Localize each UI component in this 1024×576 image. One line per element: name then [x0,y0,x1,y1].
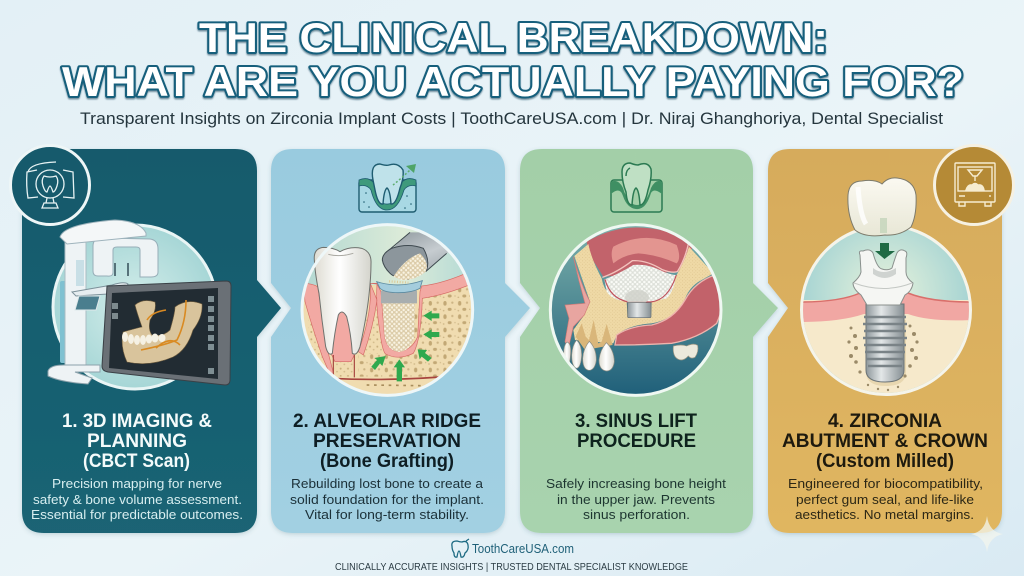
panel 3: sinus lift procedure [520,149,778,533]
description: aesthetics. No metal margins. [795,507,974,522]
lower soft tissue [615,275,723,345]
heading: 3. SINUS LIFT [575,411,697,432]
illustration: CBCT scanner with tablet [48,220,231,389]
panel 1: 3D imaging and planning [10,146,281,533]
front teeth [564,340,614,371]
circle border [302,225,473,395]
left soft tissue [565,257,590,348]
molar tooth [314,247,371,354]
socket graft [382,303,415,352]
green arrows [371,311,439,381]
icon: tooth with bone growth [359,164,416,212]
description: Precision mapping for nerve [52,476,222,491]
circle border [550,225,721,395]
panel 1 background [22,149,281,533]
description: Rebuilding lost bone to create a [291,476,484,491]
description: safety & bone volume assessment. [33,492,242,507]
bone mass [573,244,713,343]
footer tagline: CLINICALLY ACCURATE INSIGHTS | TRUSTED DENTAL SPECIALIST KNOWLEDGE [335,561,688,573]
panel 3 background [520,149,778,533]
description: Engineered for biocompatibility, [788,476,983,491]
grafting syringe [394,232,448,270]
gum tissue [303,283,334,377]
heading: (Bone Grafting) [320,451,454,472]
remaining molar [673,344,698,360]
subtitle: Transparent Insights on Zirconia Implant Costs | ToothCareUSA.com | Dr. Niraj Ghanghoriya, Dental Specialist [80,109,943,128]
heading: (Custom Milled) [816,451,954,472]
arrow [875,243,895,259]
description [290,476,484,522]
title: THE CLINICAL BREAKDOWN: [199,14,828,61]
implant fixture [628,303,651,318]
panel 2: alveolar ridge preservation [271,149,530,533]
description: in the upper jaw. Prevents [557,492,716,507]
abutment [853,250,913,305]
illustration: implant with crown [800,178,972,395]
description: Essential for predictable outcomes. [31,507,243,522]
badge: scanner icon [10,146,90,224]
panel 4 background [768,149,1002,533]
heading [782,411,988,472]
heading [62,411,212,472]
sparkle [971,516,1003,552]
heading: PLANNING [87,431,187,452]
heading: PRESERVATION [313,431,461,452]
description: Vital for long-term stability. [305,507,469,522]
heading: (CBCT Scan) [83,451,190,472]
nerve [338,376,439,380]
description: sinus perforation. [583,507,690,522]
zirconia crown [848,178,916,236]
description: perfect gum seal, and life-like [796,492,974,507]
illustration: sinus lift cross-section [550,225,723,395]
heading [293,411,481,472]
heading: PROCEDURE [577,431,696,452]
title: WHAT ARE YOU ACTUALLY PAYING FOR? [62,58,964,105]
brand name: ToothCareUSA.com [472,541,574,556]
heading [575,411,697,452]
description: Safely increasing bone height [546,476,726,491]
sinus cavity [587,227,693,277]
description: solid foundation for the implant. [290,492,484,507]
membrane [377,281,422,293]
panel 4: zirconia abutment and crown [768,146,1014,533]
heading: 4. ZIRCONIA [828,411,942,432]
illustration: socket bone graft [302,225,475,397]
panel 2 background [271,149,530,533]
heading: 1. 3D IMAGING & [62,411,212,432]
icon: tooth in gum [611,163,662,212]
description [31,476,243,522]
bone [302,270,472,397]
jaw model on tablet [122,301,202,364]
roots [576,320,613,350]
description [546,476,726,522]
badge: milling machine icon [934,146,1014,224]
icon: tooth logo [452,539,469,557]
heading: ABUTMENT & CROWN [782,431,988,452]
implant screw [866,304,904,382]
title [62,14,964,105]
graft material [604,265,676,302]
footer logo [452,539,574,557]
description [788,476,983,522]
heading: 2. ALVEOLAR RIDGE [293,411,481,432]
